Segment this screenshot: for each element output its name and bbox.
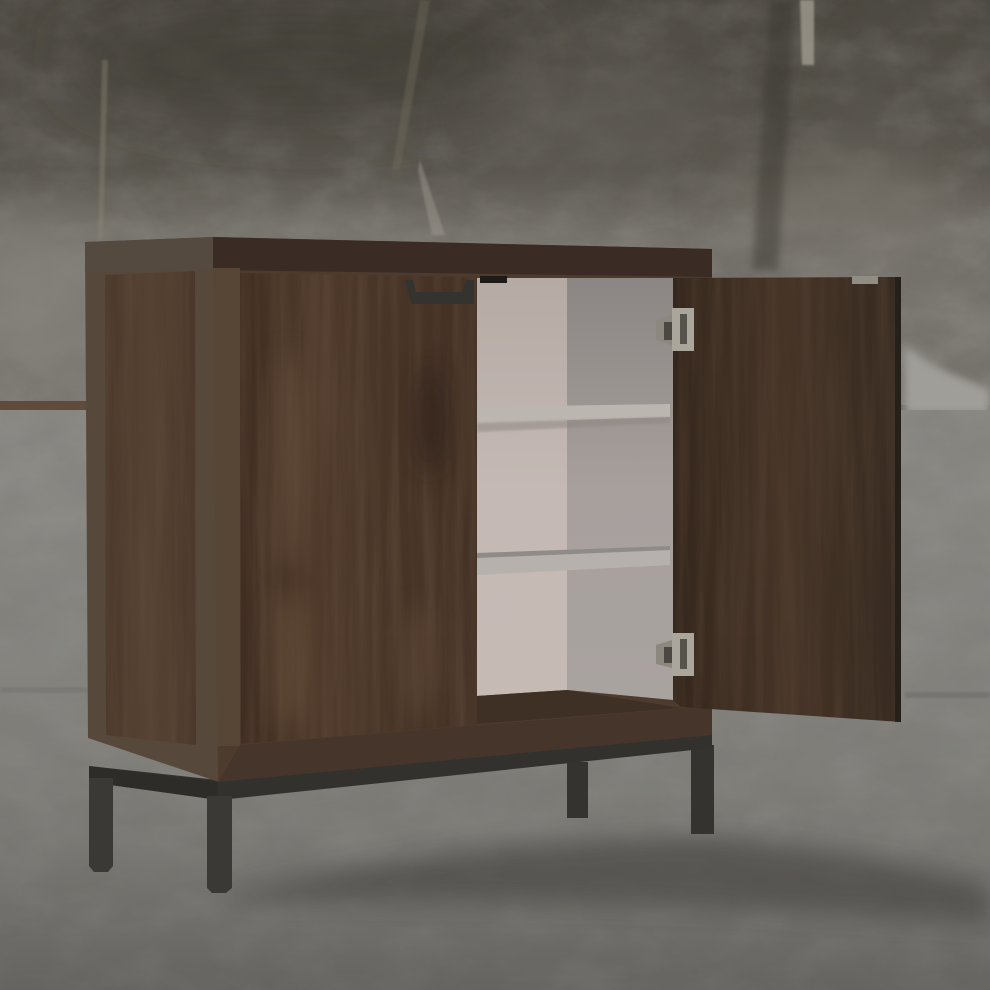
cabinet interior xyxy=(477,278,682,724)
upper hinge xyxy=(656,308,694,351)
open right door xyxy=(670,270,905,725)
back wall right xyxy=(567,278,673,700)
cabinet side panel xyxy=(85,237,219,782)
lower hinge xyxy=(656,633,694,676)
back wall left xyxy=(477,278,567,696)
lower shelf xyxy=(477,546,670,575)
shadow under upper shelf xyxy=(477,417,670,432)
metal base frame xyxy=(89,733,712,800)
catch plate xyxy=(480,276,507,283)
concrete floor xyxy=(0,410,990,990)
back legs xyxy=(567,745,714,834)
door handle xyxy=(405,280,474,304)
concrete wall xyxy=(0,0,990,405)
upper shelf xyxy=(477,404,670,423)
cabinet front frame xyxy=(213,237,712,782)
cabinet floor xyxy=(477,690,682,724)
floor shadow xyxy=(230,838,990,925)
front legs xyxy=(89,778,232,893)
closed left door xyxy=(235,265,480,750)
wall base and rubble xyxy=(0,345,990,414)
